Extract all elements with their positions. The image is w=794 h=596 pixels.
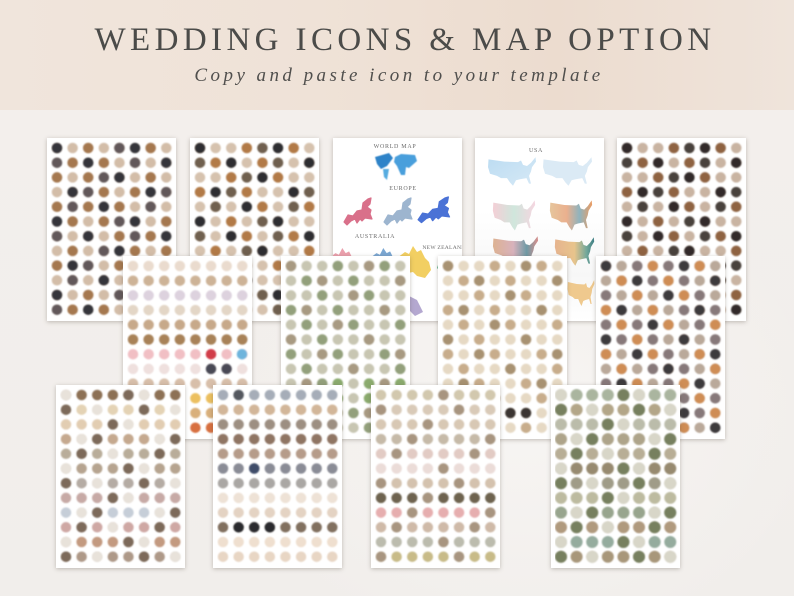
panel: dog icons sheet 3 xyxy=(617,138,746,321)
map: Australia blue xyxy=(370,248,399,275)
header band xyxy=(0,0,794,110)
label: USA: USA xyxy=(529,148,543,154)
panel: dog icons sheet 2 xyxy=(190,138,319,321)
panel: wedding cake icons xyxy=(438,256,567,439)
map: Australia pink xyxy=(329,248,358,275)
panel: cat icons xyxy=(596,256,725,439)
map: world xyxy=(375,153,417,180)
title: WEDDING ICONS & MAP OPTION xyxy=(94,22,716,58)
map: Europe blue xyxy=(418,197,449,223)
map: Australia yellow xyxy=(397,246,431,278)
map: USA paler blue xyxy=(543,157,592,186)
label: Australia: AUSTRALIA xyxy=(355,234,395,240)
map: USA teal states xyxy=(555,237,594,266)
panel: couples, suits, dresses and shoes icons xyxy=(213,385,342,568)
map: USA pale blue xyxy=(488,157,536,186)
panel: venue watercolour icons xyxy=(281,256,410,439)
panel: rings, cars, cameras and travel icons xyxy=(56,385,185,568)
panel: arches and chapels icons xyxy=(371,385,500,568)
map: Europe red xyxy=(344,198,372,225)
map: USA coloured states xyxy=(550,200,592,230)
panel: dog icons sheet 1 xyxy=(47,138,176,321)
map: New Zealand lilac xyxy=(405,296,423,316)
map: USA muted states xyxy=(493,236,538,265)
panel: USA maps xyxy=(475,138,604,321)
panel: world, Europe, Australia and New Zealand maps xyxy=(333,138,462,321)
label: world map: WORLD MAP xyxy=(374,144,416,150)
panel: venue and landscape icons xyxy=(551,385,680,568)
subtitle: Copy and paste icon to your template xyxy=(194,65,604,86)
map: Europe grey-blue xyxy=(384,198,412,225)
panel: stationery and accessories icons xyxy=(123,256,252,439)
map: New Zealand xyxy=(437,262,443,272)
label: Europe: EUROPE xyxy=(389,186,417,192)
map: USA pastel xyxy=(493,200,535,230)
map: USA yellow and red states xyxy=(568,280,594,306)
